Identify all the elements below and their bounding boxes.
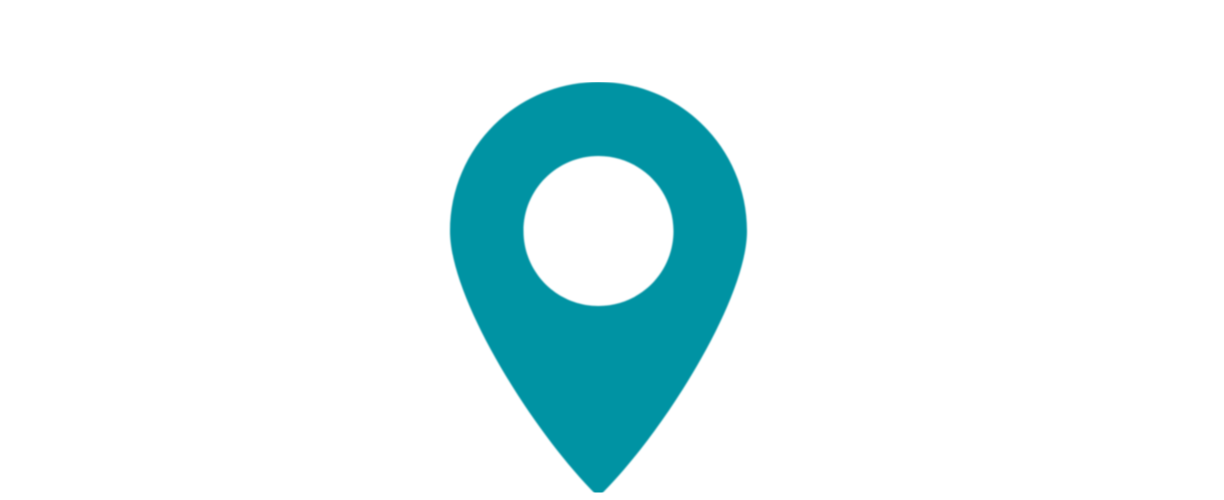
icon: location pin	[448, 82, 748, 492]
